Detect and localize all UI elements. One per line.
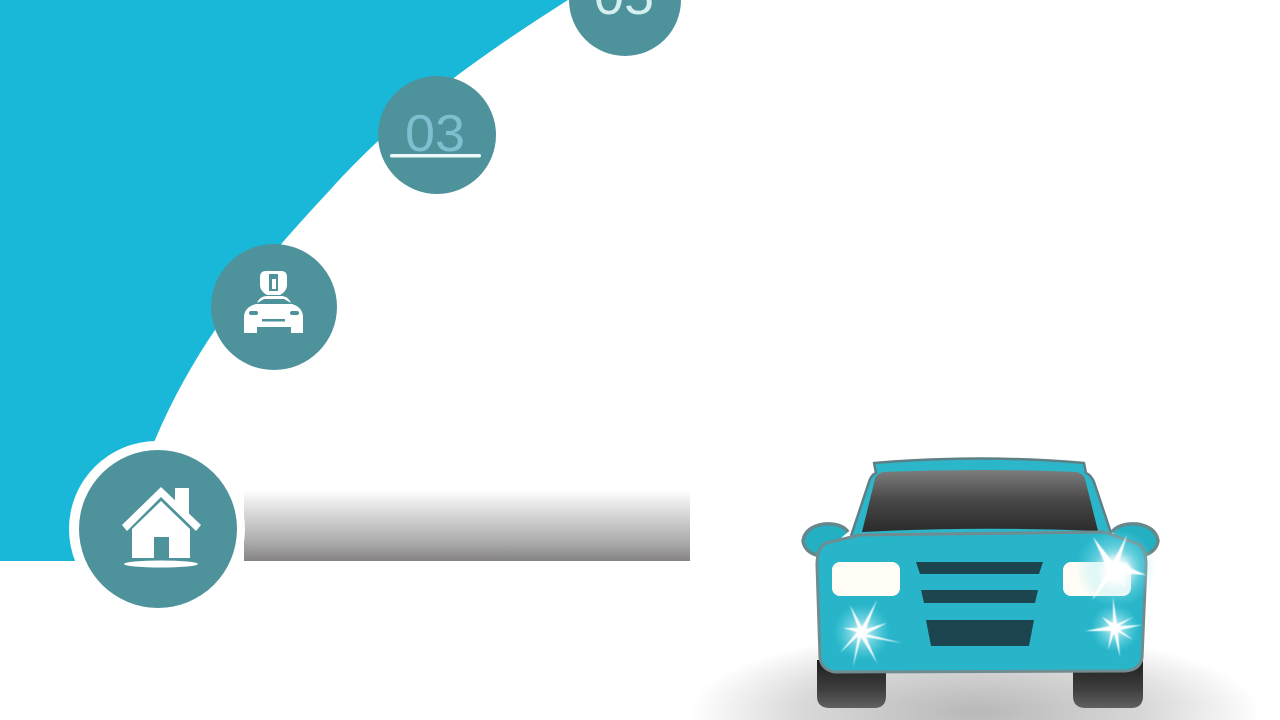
car illustration [803,458,1158,708]
step circle: home [69,441,245,617]
icon: car with phone [244,271,303,333]
sparkle: lower left [834,600,902,667]
mirrors [803,524,1158,556]
number 03: 03 [405,105,465,163]
step circle: 03 [378,76,496,194]
windshield [862,470,1098,532]
icon: house [122,487,201,568]
baseline rule [390,154,481,158]
grille [916,562,1043,646]
step circle: 05 clipped by top edge [569,0,681,56]
grey gradient bar [244,490,690,561]
sparkle: right headlight [1076,528,1156,608]
cabin and roof [851,458,1112,536]
wheels [817,660,1143,708]
ground shadow [690,630,1260,720]
blue curved background [0,0,568,561]
sparkle: lower right [1085,597,1142,657]
headlights [832,562,900,596]
car body [817,532,1146,672]
step circle: car with phone [211,244,337,370]
